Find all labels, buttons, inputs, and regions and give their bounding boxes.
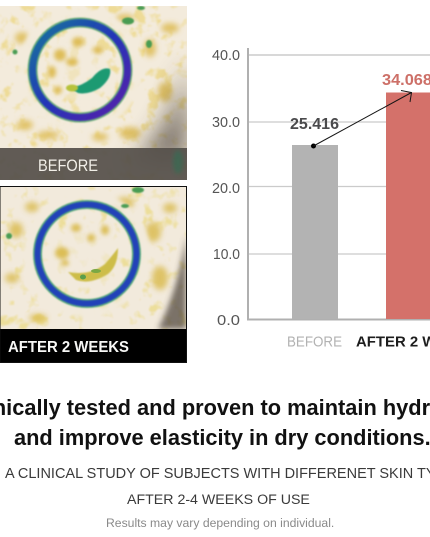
label band: after 2 weeks: AFTER 2 WEEKS <box>8 339 129 356</box>
panel: after 2 weeks skin photo <box>0 187 186 362</box>
y-axis labels <box>212 47 240 329</box>
heading line 2: and improve elasticity in dry conditions. <box>14 425 430 450</box>
green moisture patches <box>6 187 144 239</box>
bar chart <box>212 47 430 350</box>
smile, after <box>68 248 118 282</box>
shadow corner <box>128 66 187 148</box>
panel border <box>0 186 186 362</box>
hydration ring, after <box>38 204 136 304</box>
clear halo around ring <box>22 12 138 128</box>
x label: before: BEFORE <box>287 334 342 350</box>
label band: after 2 weeks <box>0 329 186 362</box>
bar: before <box>292 145 338 319</box>
panel: before skin photo <box>0 6 187 180</box>
clear halo around ring <box>28 195 146 313</box>
arrow: increase <box>311 90 412 148</box>
y-axis labels: 20.0 <box>212 180 240 197</box>
axis <box>248 48 430 320</box>
green moisture patches <box>12 6 152 54</box>
value: 25.416: 25.416 <box>290 116 339 133</box>
y-axis labels: 0.0 <box>217 312 240 329</box>
inner yellow specks <box>55 224 109 266</box>
hydration ring, before <box>32 22 128 118</box>
yellow moisture mottling <box>0 6 187 148</box>
shadow corner <box>158 235 186 329</box>
label band: before <box>0 148 187 180</box>
label band: before: BEFORE <box>38 157 98 175</box>
y-axis labels: 10.0 <box>213 246 240 263</box>
disclaimer: Results may vary depending on individual. <box>106 516 334 530</box>
y-axis labels: 30.0 <box>212 114 240 131</box>
inner yellow specks <box>48 37 103 94</box>
bar: after 2 weeks <box>386 92 430 319</box>
smile, before <box>70 68 110 93</box>
yellow moisture mottling <box>0 187 186 329</box>
value: 34.068: 34.068 <box>382 72 430 89</box>
y-axis labels: 40.0 <box>212 47 240 64</box>
study description line 2: AFTER 2-4 WEEKS OF USE <box>127 492 310 508</box>
